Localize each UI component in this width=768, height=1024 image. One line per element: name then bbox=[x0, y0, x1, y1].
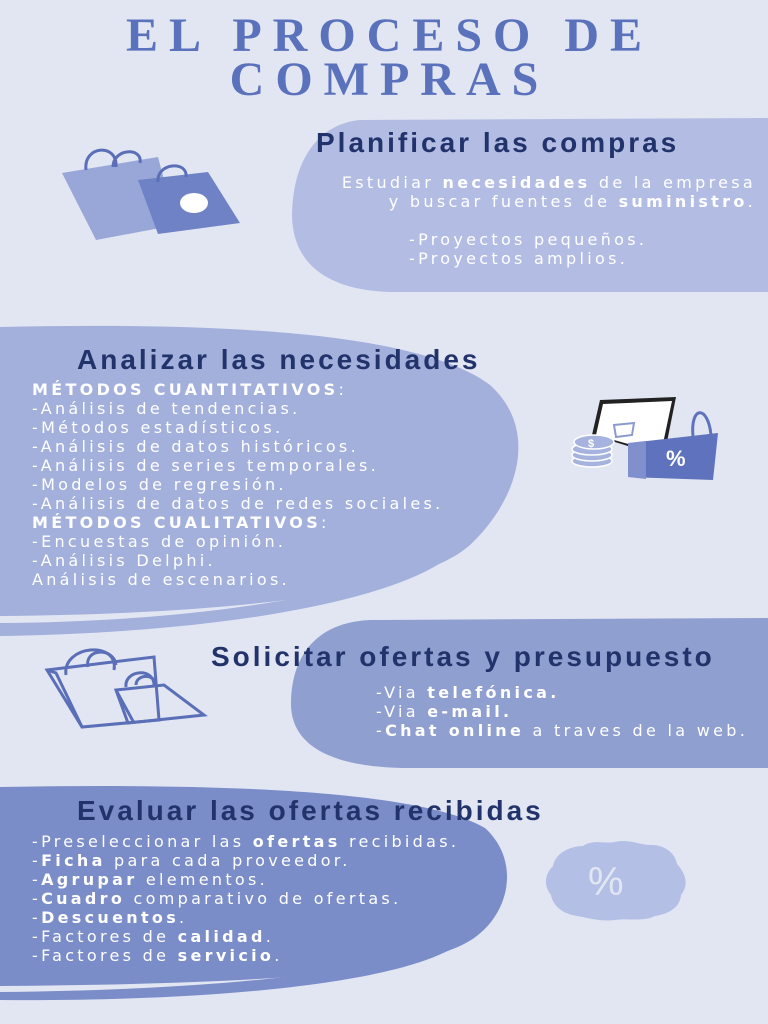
text: proyectos: -Proyectos amplios. bbox=[409, 249, 628, 268]
heading: analizar: Analizar las necesidades bbox=[77, 344, 481, 375]
text: evaluar: -Ficha para cada proveedor. bbox=[32, 851, 351, 870]
text: metodos: Análisis de escenarios. bbox=[32, 570, 290, 589]
text: metodos: -Modelos de regresión. bbox=[32, 475, 287, 494]
text: planificar bbox=[342, 173, 756, 211]
icon: tablet shopping bbox=[571, 397, 718, 480]
text: planificar: y buscar fuentes de suministro. bbox=[389, 192, 756, 211]
icon: outline bags bbox=[44, 648, 208, 729]
text: metodos: MÉTODOS CUALITATIVOS: bbox=[32, 513, 330, 532]
text: solicitar: -Chat online a traves de la web. bbox=[376, 721, 748, 740]
icon: percent badge bbox=[546, 841, 686, 920]
icon: tablet shopping: $ bbox=[588, 438, 594, 450]
text: metodos: -Análisis Delphi. bbox=[32, 551, 216, 570]
text: proyectos bbox=[409, 230, 647, 268]
text: metodos bbox=[32, 380, 444, 589]
blob: analizar bbox=[0, 326, 518, 636]
icon: shopping bags bbox=[62, 148, 240, 240]
title bbox=[126, 9, 653, 106]
text: metodos: -Análisis de datos de redes sociales. bbox=[32, 494, 444, 513]
icon: tablet shopping: % bbox=[666, 446, 686, 471]
text: planificar: Estudiar necesidades de la empresa bbox=[342, 173, 756, 192]
text: metodos: -Análisis de series temporales. bbox=[32, 456, 379, 475]
text: metodos: MÉTODOS CUANTITATIVOS: bbox=[32, 380, 347, 399]
text: evaluar: -Factores de servicio. bbox=[32, 946, 283, 965]
heading: solicitar: Solicitar ofertas y presupuesto bbox=[211, 641, 715, 672]
text: evaluar bbox=[32, 832, 459, 965]
title: EL PROCESO DE bbox=[126, 9, 653, 62]
text: solicitar bbox=[376, 683, 748, 740]
blob: evaluar bbox=[0, 786, 507, 1000]
text: evaluar: -Factores de calidad. bbox=[32, 927, 274, 946]
title: COMPRAS bbox=[230, 53, 549, 106]
blob: planificar bbox=[292, 118, 768, 292]
text: metodos: -Análisis de datos históricos. bbox=[32, 437, 359, 456]
heading: planificar: Planificar las compras bbox=[316, 127, 679, 158]
text: evaluar: -Descuentos. bbox=[32, 908, 187, 927]
text: solicitar: -Via e-mail. bbox=[376, 702, 512, 721]
icon: percent badge: % bbox=[588, 860, 624, 904]
text: proyectos: -Proyectos pequeños. bbox=[409, 230, 647, 249]
text: metodos: -Encuestas de opinión. bbox=[32, 532, 286, 551]
text: evaluar: -Preseleccionar las ofertas recibidas. bbox=[32, 832, 459, 851]
text: solicitar: -Via telefónica. bbox=[376, 683, 560, 702]
text: evaluar: -Agrupar elementos. bbox=[32, 870, 268, 889]
text: metodos: -Análisis de tendencias. bbox=[32, 399, 301, 418]
text: metodos: -Métodos estadísticos. bbox=[32, 418, 283, 437]
heading: evaluar: Evaluar las ofertas recibidas bbox=[77, 795, 544, 826]
blob: solicitar bbox=[291, 618, 768, 768]
text: evaluar: -Cuadro comparativo de ofertas. bbox=[32, 889, 401, 908]
